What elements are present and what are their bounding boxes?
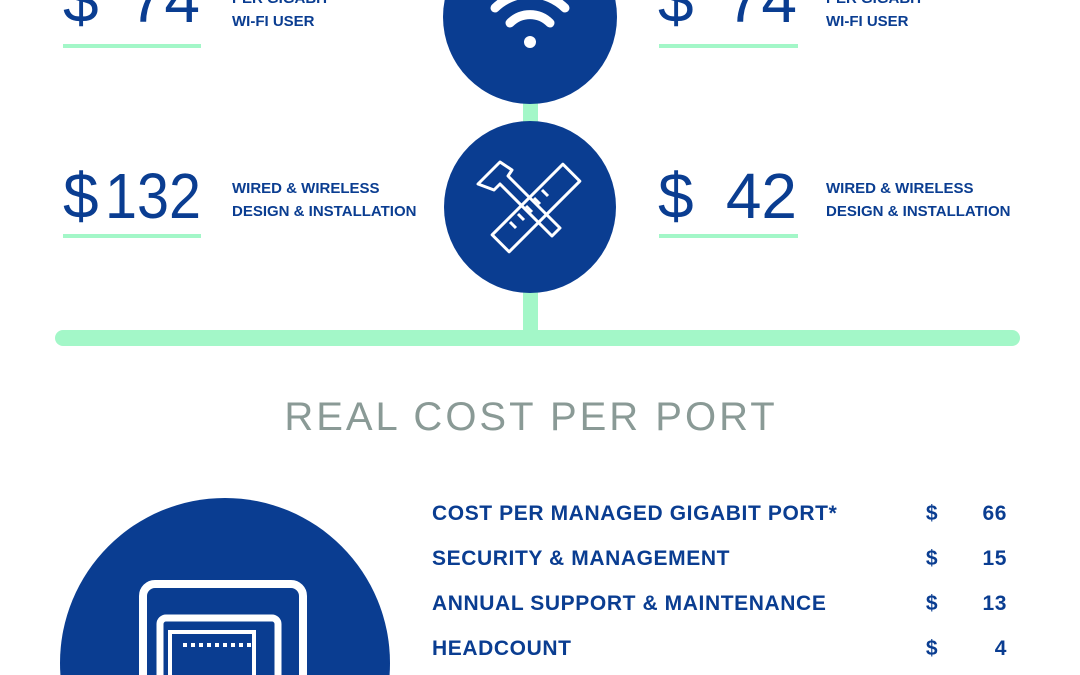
- cost table: 15: [982, 547, 1007, 570]
- cost table: 4: [995, 637, 1007, 660]
- left item: wifi cost: [63, 0, 330, 48]
- connector vertical line: [523, 60, 538, 340]
- left item: wifi cost: WI-FI USER: [232, 13, 315, 30]
- cost table: HEADCOUNT: [432, 637, 572, 660]
- icon: tools circle: [444, 121, 616, 293]
- right item: wifi cost: WI-FI USER: [826, 13, 909, 30]
- title: REAL COST PER PORT: [284, 395, 778, 439]
- left item: design & installation: [63, 160, 416, 238]
- icon: wifi circle: [443, 0, 617, 104]
- right item: design & installation: 42: [726, 160, 797, 232]
- icon: switch port circle: [60, 498, 390, 675]
- left item: design & installation: DESIGN & INSTALLATION: [232, 203, 416, 220]
- connector horizontal line: [55, 330, 1020, 346]
- left item: design & installation: 132: [105, 160, 201, 232]
- cost table: $: [926, 547, 938, 570]
- cost table: COST PER MANAGED GIGABIT PORT*: [432, 502, 838, 525]
- right item: design & installation: WIRED & WIRELESS: [826, 180, 974, 197]
- cost table: ANNUAL SUPPORT & MAINTENANCE: [432, 592, 826, 615]
- right item: design & installation: DESIGN & INSTALLATION: [826, 203, 1010, 220]
- right item: design & installation: $: [658, 160, 694, 232]
- cost table: 13: [982, 592, 1007, 615]
- left item: design & installation: $: [63, 160, 99, 232]
- cost table: $: [926, 502, 938, 525]
- cost table: [432, 502, 1007, 660]
- cost table: 66: [982, 502, 1007, 525]
- cost table: SECURITY & MANAGEMENT: [432, 547, 730, 570]
- left item: design & installation: WIRED & WIRELESS: [232, 180, 380, 197]
- cost table: $: [926, 637, 938, 660]
- right item: design & installation: [658, 160, 1010, 238]
- right item: wifi cost: [658, 0, 924, 48]
- cost table: $: [926, 592, 938, 615]
